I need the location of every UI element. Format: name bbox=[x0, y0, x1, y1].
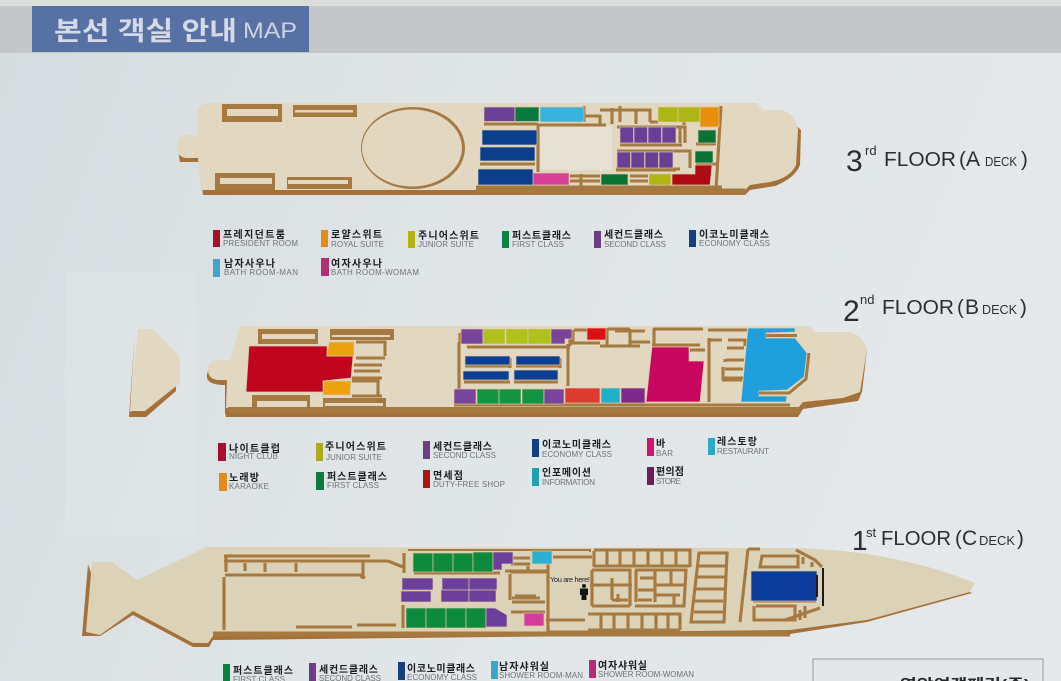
hull shadow bbox=[178, 120, 801, 195]
legend: 3rd floor bbox=[213, 228, 770, 277]
legend: 2nd floor: RESTAURANT bbox=[717, 447, 769, 456]
deck plan: 2nd floor bbox=[129, 326, 867, 417]
legend: 2nd floor: 바 bbox=[656, 437, 665, 450]
floor label: 3rd: 3 bbox=[846, 145, 863, 178]
legend: 3rd floor: BATH ROOM-MAN bbox=[224, 268, 298, 277]
floor label: 2nd: FLOOR bbox=[882, 296, 954, 319]
legend: 2nd floor: 세컨드클래스 bbox=[433, 440, 492, 453]
legend: 3rd floor: 세컨드클래스 bbox=[604, 228, 663, 241]
legend: 2nd floor: 퍼스트클래스 bbox=[327, 470, 387, 483]
header band bbox=[0, 6, 1061, 53]
floor label: 1st: FLOOR bbox=[881, 527, 951, 550]
legend: 3rd floor: ROYAL SUITE bbox=[331, 240, 384, 249]
aft cabin blocks bbox=[215, 104, 357, 190]
legend: 2nd floor: BAR bbox=[656, 449, 673, 458]
floor label: 2nd: B bbox=[965, 296, 979, 319]
icon: person bbox=[580, 584, 588, 600]
walls bbox=[213, 549, 822, 635]
floor label: 1st: C bbox=[962, 527, 977, 550]
you are here marker: You are here! bbox=[550, 575, 590, 584]
circular atrium bbox=[361, 107, 465, 189]
legend: 3rd floor: ECONOMY CLASS bbox=[699, 239, 770, 248]
legend: 2nd floor: 이코노미클래스 bbox=[542, 438, 611, 451]
bow piece bbox=[129, 329, 180, 417]
legend: 3rd floor: 퍼스트클래스 bbox=[512, 229, 571, 242]
floor label: 1st: ( bbox=[955, 527, 962, 550]
legend: 2nd floor: 레스토랑 bbox=[717, 435, 757, 448]
legend: 2nd floor: ECONOMY CLASS bbox=[542, 450, 612, 459]
legend: 3rd floor: 프레지던트룸 bbox=[223, 228, 285, 241]
inner lounge bbox=[540, 126, 612, 170]
hull shadow bbox=[82, 564, 972, 647]
legend: 3rd floor: FIRST CLASS bbox=[512, 240, 564, 249]
legend: 3rd floor: PRESIDENT ROOM bbox=[223, 239, 298, 248]
legend: 1st floor bbox=[223, 659, 694, 681]
legend: 2nd floor: DUTY-FREE SHOP bbox=[433, 480, 505, 489]
floor label: 2nd: ) bbox=[1020, 296, 1027, 319]
legend: 3rd floor: 이코노미클래스 bbox=[699, 228, 769, 241]
legend: 2nd floor: STORE bbox=[656, 477, 681, 486]
legend: 3rd floor: SECOND CLASS bbox=[604, 240, 666, 249]
legend: 3rd floor: 주니어스위트 bbox=[418, 229, 479, 242]
floor label: 2nd: nd bbox=[860, 292, 874, 307]
walls bbox=[228, 328, 800, 410]
title label: 본선 객실 안내 bbox=[54, 16, 237, 46]
legend: 1st floor: 퍼스트클래스 bbox=[233, 664, 293, 677]
floor label: 1st: DECK bbox=[979, 533, 1015, 548]
title label bbox=[32, 6, 309, 52]
legend: 2nd floor: 나이트클럽 bbox=[229, 442, 280, 455]
legend: 2nd floor: 노래방 bbox=[229, 471, 259, 484]
deck plan: 3rd floor bbox=[177, 103, 801, 195]
rooms: 1st floor bbox=[401, 551, 817, 628]
you are here marker bbox=[550, 575, 590, 600]
legend: 3rd floor: 로얄스위트 bbox=[331, 228, 382, 241]
floor label: 3rd: A bbox=[966, 148, 980, 171]
floor label: 3rd: ) bbox=[1021, 148, 1028, 171]
floor label: 1st bbox=[852, 525, 1024, 556]
legend: 2nd floor: KARAOKE bbox=[229, 482, 269, 491]
floor label: 2nd: DECK bbox=[982, 302, 1017, 317]
hull deck bbox=[177, 103, 798, 190]
legend: 2nd floor: SECOND CLASS bbox=[433, 451, 496, 460]
floor label: 3rd: FLOOR bbox=[884, 148, 956, 171]
legend: 1st floor: 여자샤워실 bbox=[598, 659, 647, 672]
legend: 2nd floor: 주니어스위트 bbox=[325, 440, 386, 453]
floor label: 3rd: ( bbox=[959, 148, 966, 171]
floor label: 2nd: 2 bbox=[843, 295, 860, 328]
title label: MAP bbox=[243, 18, 297, 43]
legend: 3rd floor: JUNIOR SUITE bbox=[418, 240, 474, 249]
floor label: 1st: 1 bbox=[852, 525, 868, 556]
floor label: 2nd bbox=[843, 292, 1027, 328]
legend: 1st floor: 세컨드클래스 bbox=[319, 663, 378, 676]
legend: 3rd floor: 남자사우나 bbox=[224, 257, 275, 270]
black side bars bbox=[817, 568, 823, 606]
hull deck bbox=[86, 547, 975, 643]
aft cabin blocks bbox=[252, 329, 394, 410]
legend: 2nd floor: 인포메이션 bbox=[542, 466, 591, 479]
legend: 2nd floor bbox=[218, 435, 769, 491]
legend: 3rd floor: BATH ROOM-WOMAM bbox=[331, 268, 419, 277]
floor label: 3rd: DECK bbox=[985, 154, 1017, 169]
rooms: 3rd floor bbox=[478, 107, 719, 185]
hull deck bbox=[208, 326, 867, 408]
floor label: 1st: ) bbox=[1017, 527, 1024, 550]
floor label: 1st: st bbox=[866, 525, 876, 540]
legend: 2nd floor: INFORMATION bbox=[542, 478, 595, 487]
legend: 1st floor: SHOWER ROOM-MAN bbox=[499, 671, 583, 680]
rooms: 2nd floor bbox=[246, 328, 807, 404]
legend: 1st floor: 남자샤워실 bbox=[499, 660, 549, 673]
legend: 2nd floor: FIRST CLASS bbox=[327, 481, 379, 490]
legend: 2nd floor: NIGHT CLUB bbox=[229, 452, 278, 461]
legend: 2nd floor: 편의점 bbox=[656, 466, 684, 478]
floor label: 3rd: rd bbox=[865, 143, 877, 158]
legend: 1st floor: SHOWER ROOM-WOMAN bbox=[598, 670, 694, 679]
legend: 3rd floor: 여자사우나 bbox=[331, 257, 382, 270]
deck plan: 1st floor bbox=[82, 547, 975, 647]
legend: 1st floor: 이코노미클래스 bbox=[407, 662, 475, 675]
legend: 2nd floor: 면세점 bbox=[433, 469, 463, 482]
bottom-right notice panel bbox=[813, 659, 1043, 681]
room block walls bbox=[476, 106, 745, 191]
floor label: 3rd bbox=[846, 143, 1028, 178]
floor label: 2nd: ( bbox=[957, 296, 964, 319]
legend: 2nd floor: JUNIOR SUITE bbox=[326, 453, 382, 462]
hull shadow bbox=[207, 350, 867, 417]
